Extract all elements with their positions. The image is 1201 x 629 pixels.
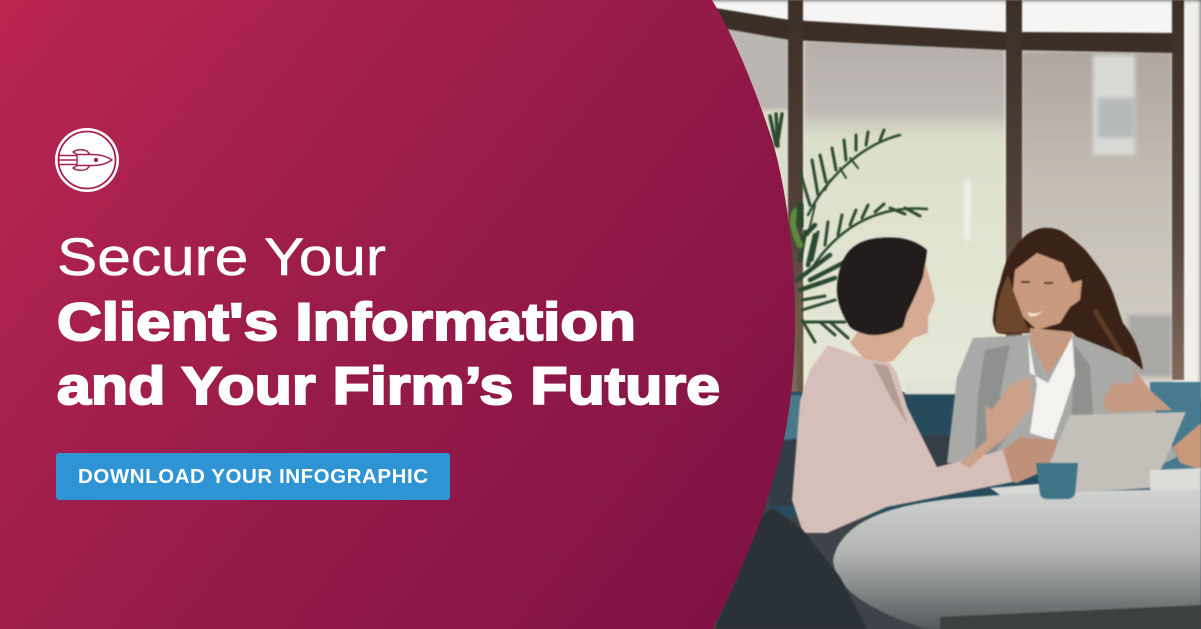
chair — [715, 508, 867, 629]
heading — [57, 228, 720, 416]
window background — [700, 0, 1201, 400]
download button — [56, 453, 450, 500]
photo: two women talking at a table by a window — [700, 0, 1201, 629]
heading line 1: Secure Your — [57, 228, 386, 287]
icon: rocket badge — [55, 128, 119, 192]
sofa — [770, 380, 1201, 517]
table — [833, 468, 1201, 629]
coffee mug — [1036, 463, 1078, 499]
woman left — [792, 238, 1057, 533]
right hand — [1103, 370, 1172, 412]
woman right — [947, 228, 1201, 470]
shirt — [1028, 337, 1075, 440]
back hair — [993, 228, 1143, 377]
photo base — [700, 390, 1201, 629]
jacket — [947, 335, 1177, 470]
maroon curved panel — [0, 0, 795, 629]
download button: DOWNLOAD YOUR INFOGRAPHIC — [78, 465, 428, 488]
laptop — [1050, 412, 1186, 493]
window frames — [715, 0, 1184, 400]
palm plant — [770, 114, 927, 400]
heading line 2: Client's Information — [57, 293, 636, 352]
heading line 3: and Your Firm’s Future — [57, 357, 720, 416]
neck — [1030, 328, 1072, 375]
face — [1013, 253, 1082, 330]
